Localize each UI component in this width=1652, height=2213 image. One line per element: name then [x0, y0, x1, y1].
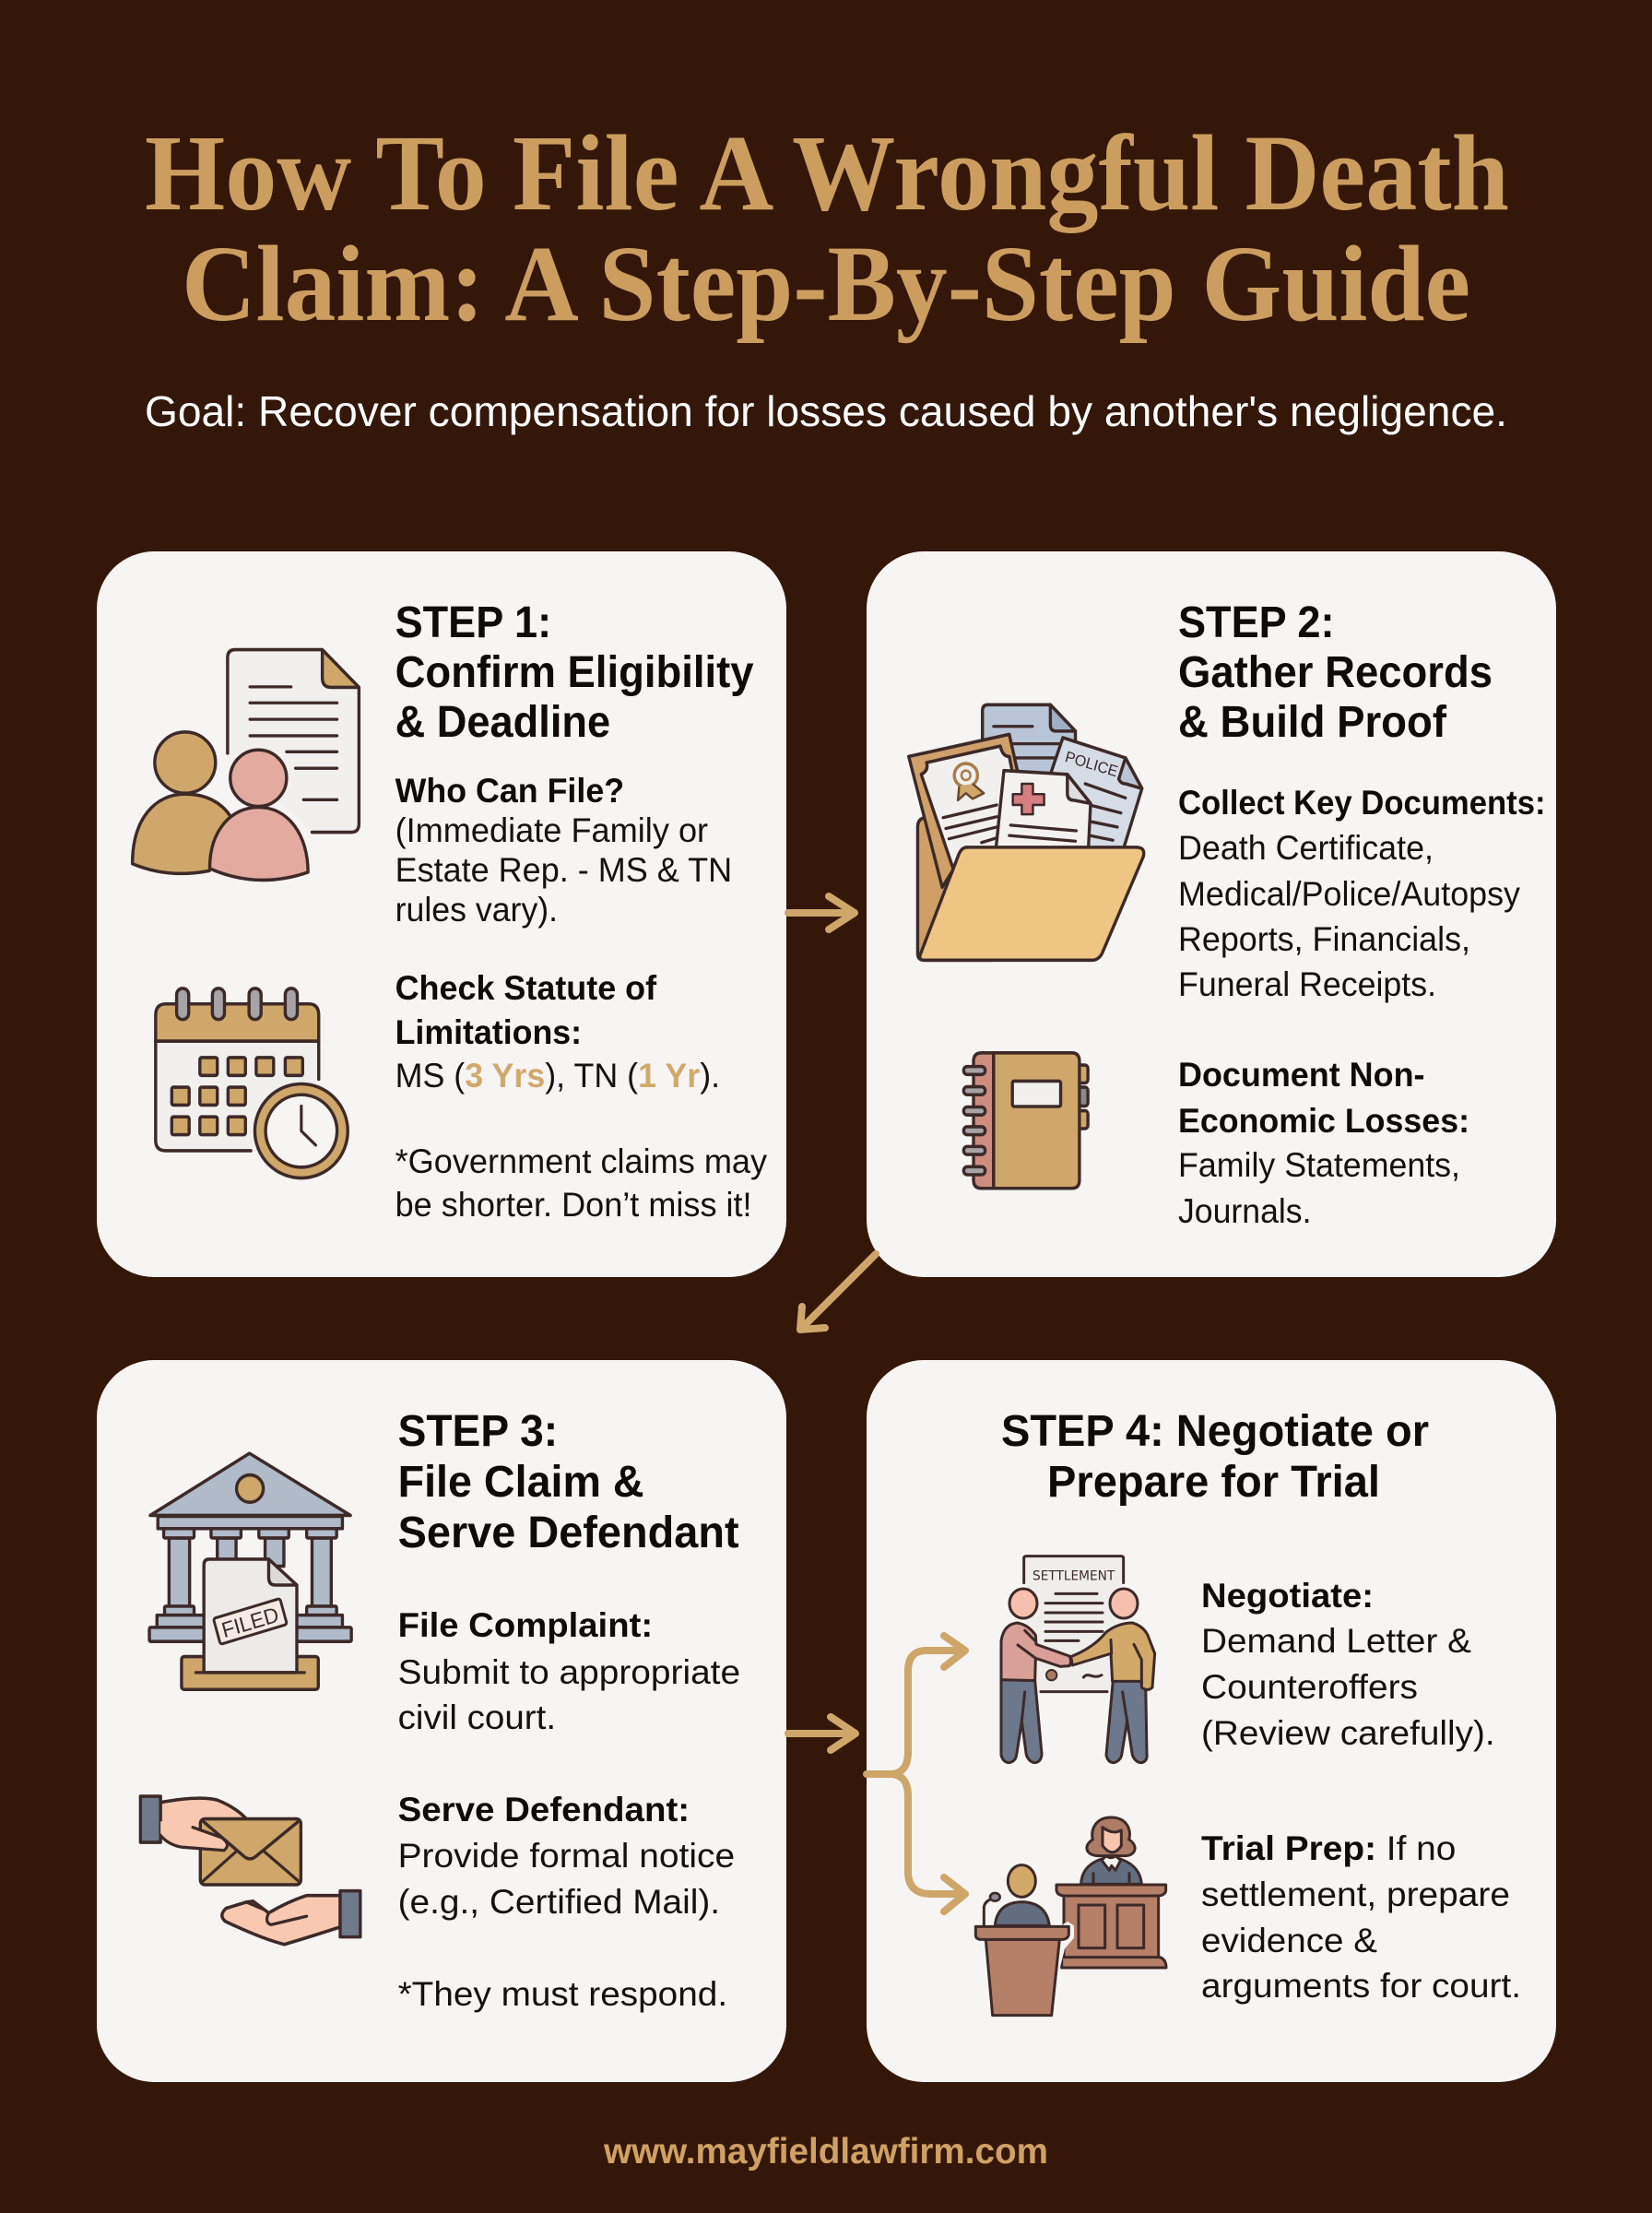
text: government claims note: be shorter. Don’t miss it!: [395, 1186, 752, 1224]
text: collect key documents: Death Certificate,: [1178, 829, 1434, 867]
icon: settlement handshake: SETTLEMENT: [1032, 1568, 1115, 1583]
step 2 heading: Gather Records: [1178, 648, 1493, 697]
text: statute of limitations: Limitations:: [395, 1013, 582, 1051]
text: trial prep: Trial Prep: If no: [1201, 1829, 1456, 1867]
arrow: step 3 to step 4: [788, 1717, 856, 1750]
text: statute of limitations: Check Statute of: [395, 969, 657, 1007]
text: trial prep: settlement, prepare: [1201, 1876, 1510, 1913]
icon: folder of documents: [909, 704, 1144, 960]
text: serve defendant: Serve Defendant:: [398, 1791, 690, 1828]
text: statute of limitations: [395, 969, 720, 1095]
step 3 heading: [398, 1407, 739, 1557]
step 4 heading: STEP 4: Negotiate or: [1001, 1407, 1429, 1456]
text: non-economic losses: Document Non-: [1178, 1056, 1425, 1094]
panel: step 4: [867, 1360, 1556, 2082]
text: file complaint: File Complaint:: [398, 1606, 653, 1644]
step 1 heading: [395, 598, 754, 747]
step 3 heading: File Claim &: [398, 1458, 644, 1507]
step 2 heading: & Build Proof: [1178, 698, 1447, 747]
step 2 heading: [1178, 598, 1493, 747]
text: government claims note: [395, 1142, 768, 1224]
text: who can file: [395, 772, 732, 929]
icon: hands passing envelope: [140, 1796, 360, 1945]
arrow: branching bracket: [867, 1636, 965, 1911]
title: [145, 112, 1509, 344]
text: negotiate: (Review carefully).: [1201, 1714, 1495, 1752]
arrow: step 1 to step 2: [788, 896, 855, 929]
step 1 heading: & Deadline: [395, 698, 610, 747]
text: non-economic losses: Family Statements,: [1178, 1146, 1460, 1184]
panel: step 3: [97, 1360, 786, 2082]
text: serve defendant: (e.g., Certified Mail).: [398, 1883, 720, 1921]
text: non-economic losses: [1178, 1056, 1469, 1230]
icon: calendar and clock: [156, 988, 348, 1178]
step 2 heading: STEP 2:: [1178, 598, 1335, 647]
subtitle: goal: Goal: Recover compensation for losses caused by another's negligence.: [145, 387, 1507, 435]
step 4 heading: [1001, 1407, 1429, 1507]
step 1 heading: Confirm Eligibility: [395, 648, 754, 697]
panel: step 1: [97, 551, 786, 1277]
arrow: step 2 to step 3: [800, 1254, 876, 1330]
icon: family and document: [133, 650, 359, 880]
text: non-economic losses: Journals.: [1178, 1192, 1311, 1230]
text: file complaint: Submit to appropriate: [398, 1653, 740, 1691]
icon: courthouse with filed document: FILED: [219, 1602, 281, 1642]
step 4 heading: Prepare for Trial: [1047, 1458, 1380, 1507]
icon: courtroom trial: [975, 1817, 1166, 2016]
text: who can file: (Immediate Family or: [395, 811, 708, 849]
text: negotiate: [1201, 1577, 1495, 1752]
step 1 heading: STEP 1:: [395, 598, 551, 647]
text: trial prep: evidence &: [1201, 1922, 1377, 1959]
text: non-economic losses: Economic Losses:: [1178, 1102, 1469, 1140]
text: they must respond: *They must respond.: [398, 1975, 727, 2013]
text: collect key documents: Medical/Police/Autopsy: [1178, 875, 1520, 913]
text: collect key documents: Collect Key Documents:: [1178, 784, 1545, 822]
text: negotiate: Counteroffers: [1201, 1668, 1418, 1706]
text: negotiate: Demand Letter &: [1201, 1622, 1471, 1660]
footer: website: www.mayfieldlawfirm.com: [603, 2132, 1048, 2172]
text: file complaint: civil court.: [398, 1698, 556, 1736]
title: Claim: A Step-By-Step Guide: [182, 223, 1470, 344]
text: collect key documents: Reports, Financials,: [1178, 920, 1470, 958]
text: who can file: Estate Rep. - MS & TN: [395, 851, 732, 889]
text: negotiate: Negotiate:: [1201, 1577, 1374, 1615]
icon: notebook: [963, 1053, 1088, 1189]
text: government claims note: *Government claims may: [395, 1142, 768, 1180]
text: serve defendant: Provide formal notice: [398, 1837, 735, 1875]
text: collect key documents: Funeral Receipts.: [1178, 965, 1436, 1003]
text: trial prep: [1201, 1829, 1521, 2005]
text: serve defendant: [398, 1791, 735, 1921]
step 3 heading: Serve Defendant: [398, 1509, 739, 1557]
text: who can file: rules vary).: [395, 891, 558, 929]
text: collect key documents: [1178, 784, 1545, 1003]
icon: folder of documents: POLICE: [1063, 749, 1120, 780]
icon: courthouse with filed document: [149, 1453, 351, 1689]
title: How To File A Wrongful Death: [145, 112, 1509, 233]
text: who can file: Who Can File?: [395, 772, 624, 810]
text: file complaint: [398, 1606, 740, 1736]
panel: step 2: [867, 551, 1556, 1277]
text: trial prep: arguments for court.: [1201, 1967, 1521, 2005]
text: statute of limitations: MS (3 Yrs), TN (1 Yr).: [395, 1057, 720, 1095]
icon: settlement handshake: [1001, 1556, 1155, 1763]
step 3 heading: STEP 3:: [398, 1407, 558, 1456]
